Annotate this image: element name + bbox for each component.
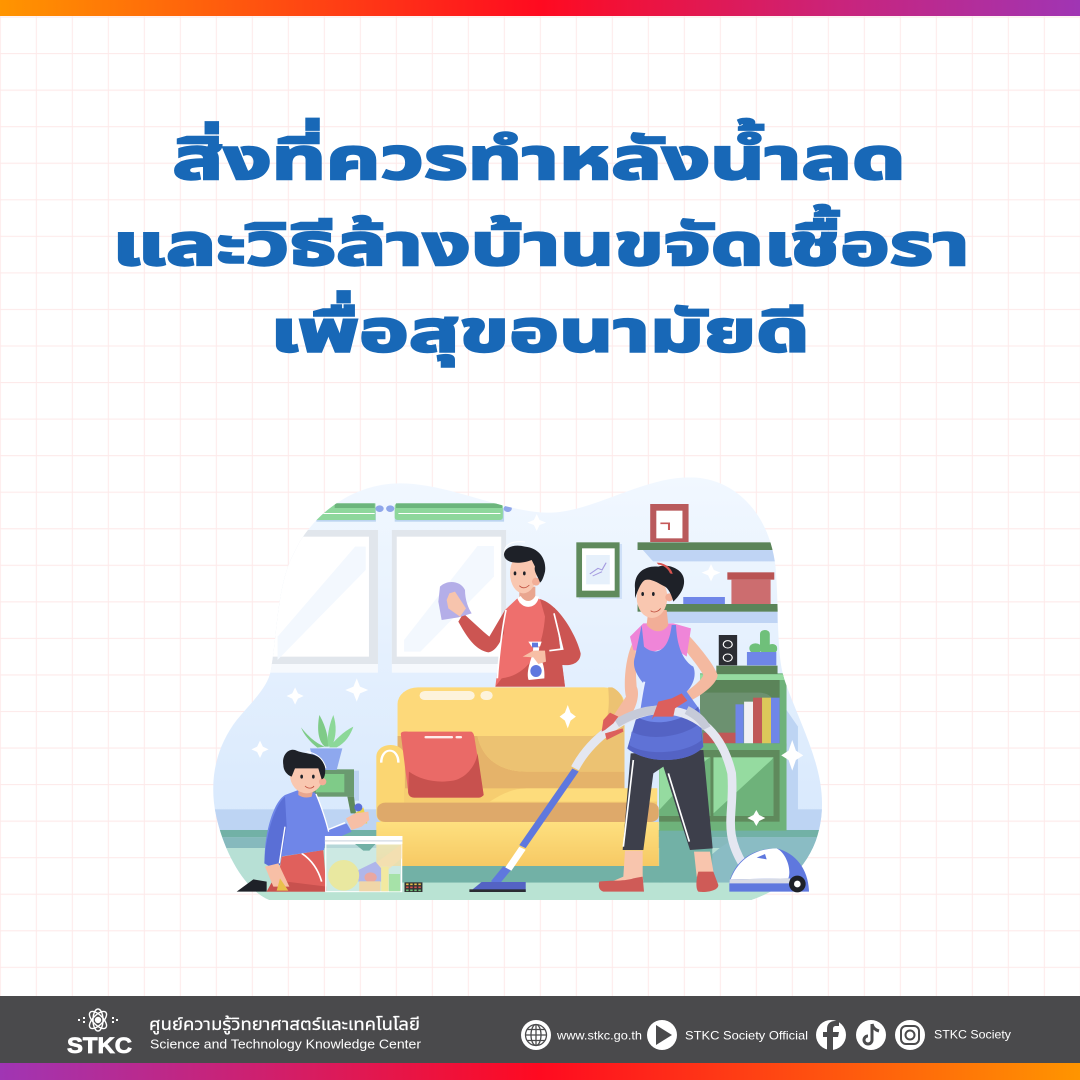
rubik cube — [404, 882, 422, 892]
woman vacuuming — [575, 563, 809, 892]
room background blob — [200, 470, 840, 910]
title — [112, 118, 970, 366]
curtain rods — [316, 503, 512, 522]
contact: instagram: STKC Society — [934, 1028, 1011, 1042]
icon: tiktok — [856, 1020, 886, 1050]
gloves — [602, 693, 687, 740]
vacuum body — [729, 848, 809, 892]
man with spray bottle — [438, 542, 581, 687]
contact: instagram — [895, 1020, 1011, 1050]
wall clock — [650, 504, 689, 542]
title: เพื่อสุขอนามัยดี — [270, 290, 810, 366]
bookcase — [659, 666, 787, 831]
speaker and cactus — [719, 630, 777, 665]
STKC logo: STKC — [67, 1033, 132, 1058]
top gradient bar — [0, 0, 1080, 16]
title: และวิธีล้างบ้านขจัดเชื้อรา — [112, 204, 970, 278]
organisation name — [149, 1014, 421, 1052]
organisation name: Science and Technology Knowledge Center — [150, 1038, 421, 1052]
contact: youtube — [647, 1020, 808, 1050]
sofa — [376, 687, 659, 866]
icon: facebook — [816, 1020, 846, 1050]
contact: website — [521, 1020, 642, 1050]
contact: website: www.stkc.go.th — [556, 1028, 642, 1042]
STKC logo — [67, 1009, 132, 1058]
picture frame — [576, 542, 622, 599]
footer band — [0, 996, 1080, 1063]
sparkles — [251, 514, 803, 826]
vacuum hose — [575, 710, 743, 865]
child playing with toys — [237, 750, 369, 892]
illustration: living room — [200, 470, 840, 910]
side table and plant — [301, 715, 359, 813]
contact: youtube: STKC Society Official — [685, 1028, 808, 1042]
vacuum wand and head — [469, 770, 576, 892]
spray bottle — [523, 642, 546, 680]
red cushion — [401, 732, 484, 798]
organisation name: ศูนย์ความรู้วิทยาศาสตร์และเทคโนโลยี — [149, 1014, 420, 1036]
wall shelves — [638, 542, 778, 623]
bottom gradient bar — [0, 1063, 1080, 1080]
toy box — [325, 770, 576, 892]
icon: atom — [78, 1009, 118, 1031]
title: สิ่งที่ควรทำหลังน้ำลด — [172, 118, 906, 192]
windows — [261, 530, 506, 673]
